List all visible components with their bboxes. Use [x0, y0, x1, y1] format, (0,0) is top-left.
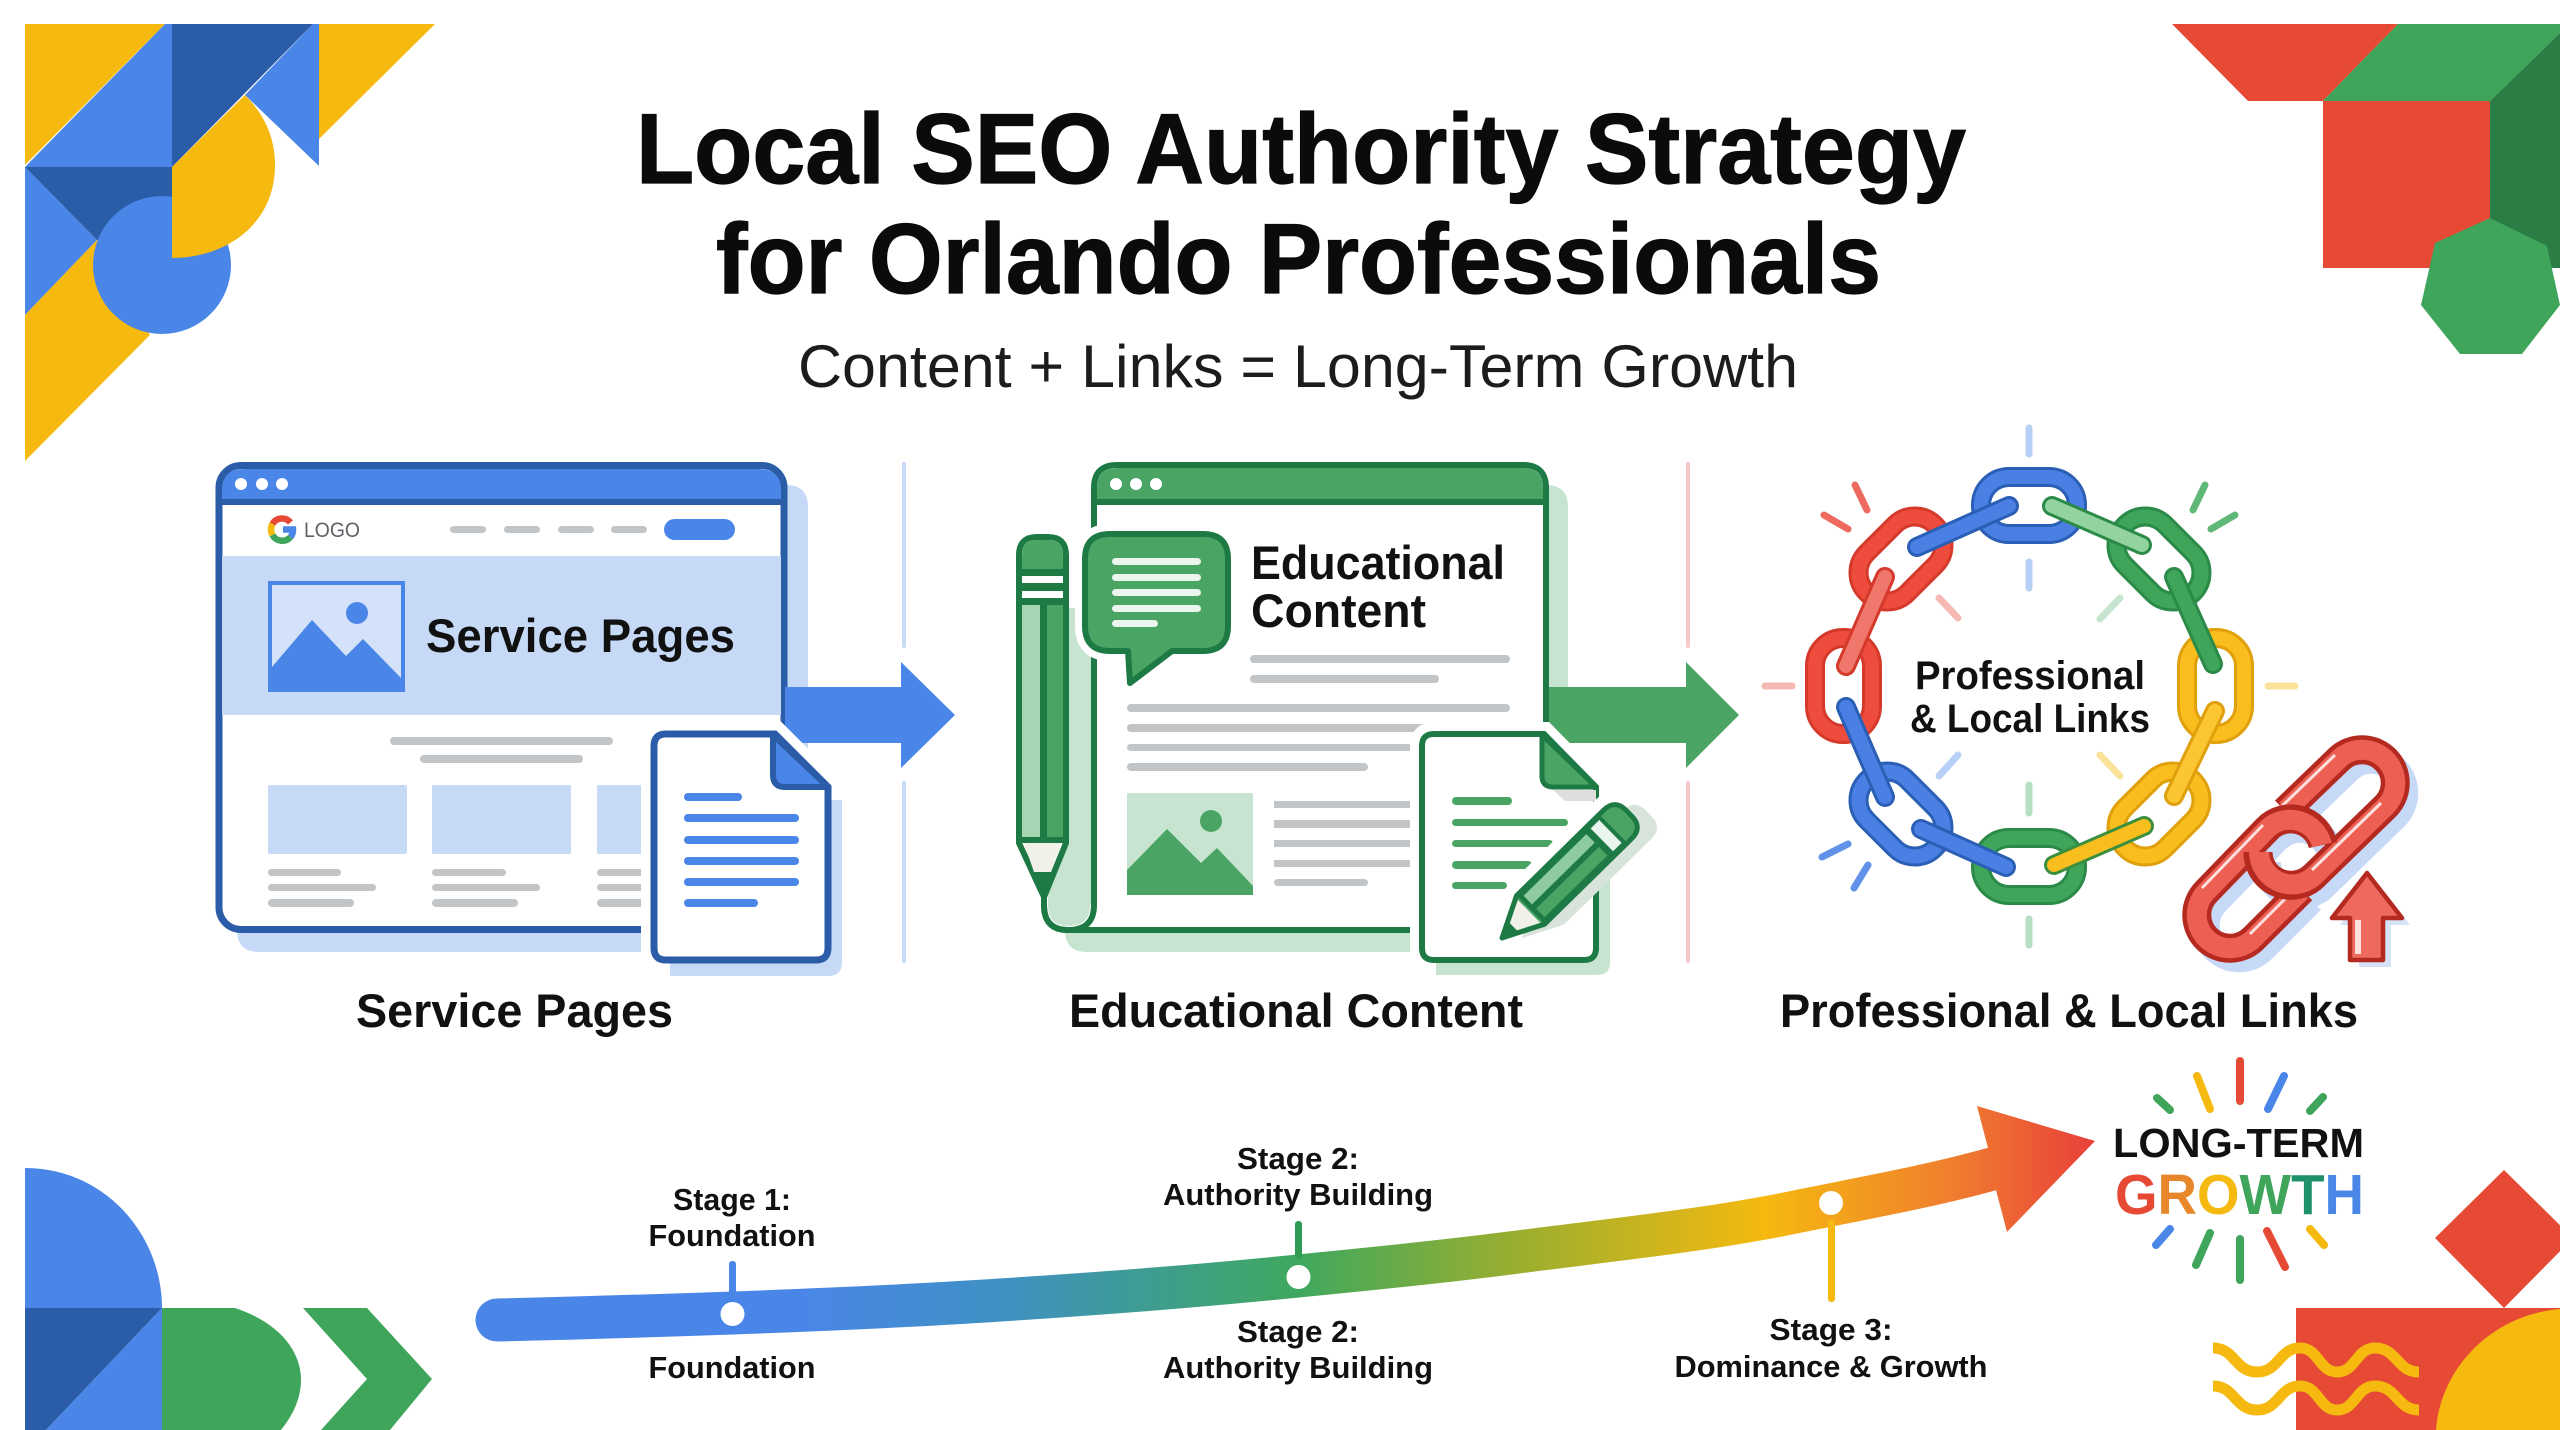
- decorative shapes: top right: [2172, 24, 2560, 354]
- stage 2 marker: [1286, 1221, 1310, 1289]
- decorative shapes: bottom left: [25, 1168, 432, 1430]
- chain centre text: [1910, 654, 2150, 741]
- badge text: GROWTH: [2115, 1163, 2364, 1227]
- title: Local SEO Authority Strategy: [636, 93, 1966, 204]
- badge text: [2113, 1120, 2364, 1227]
- stage 2 top label: [1163, 1141, 1433, 1212]
- heading: educational content: Educational: [1251, 536, 1505, 589]
- icon: tall pencil: [1019, 537, 1066, 897]
- stage 2 bottom label: Authority Building: [1163, 1350, 1433, 1385]
- chain centre text: Professional: [1915, 654, 2145, 698]
- radiating rays: [1765, 428, 2295, 945]
- stage 2 bottom label: Stage 2:: [1237, 1314, 1359, 1349]
- decorative shapes: top left: [25, 24, 435, 461]
- chain centre text: & Local Links: [1910, 697, 2150, 741]
- lower link: [2197, 819, 2323, 948]
- title: [636, 93, 1966, 314]
- heading: educational content: [1251, 536, 1505, 637]
- stage 3 label: Stage 3:: [1770, 1312, 1892, 1347]
- stage 2 bottom label: [1163, 1314, 1433, 1385]
- icon: red link: [2197, 750, 2404, 958]
- chain connecting bars: [1846, 506, 2215, 867]
- hero banner: Service Pages: [426, 609, 735, 662]
- browser window: [1044, 465, 1546, 930]
- navigation bar: [450, 519, 735, 540]
- browser shadow: [1065, 485, 1568, 952]
- subtitle: Content + Links = Long-Term Growth: [798, 333, 1798, 400]
- title: for Orlando Professionals: [716, 203, 1881, 314]
- logo text: LOGO: [304, 519, 360, 542]
- stage 2: [1163, 1141, 1433, 1385]
- stage 2 top label: Authority Building: [1163, 1177, 1433, 1212]
- badge text: LONG-TERM: [2113, 1120, 2364, 1166]
- icon: speech bubble: [1085, 534, 1228, 683]
- stage 1 top label: [648, 1182, 816, 1253]
- icon: G logo: [271, 519, 293, 541]
- stage 1 marker: [720, 1261, 744, 1326]
- burst rays: [2156, 1061, 2324, 1280]
- icon: up arrow: [2332, 873, 2410, 967]
- stage 3 marker: [1819, 1191, 1843, 1302]
- chain ring links: [1815, 477, 2244, 895]
- panel: service pages: [219, 466, 955, 1037]
- scroll side: [1044, 608, 1093, 930]
- divider: blue: [902, 464, 906, 961]
- timeline: [497, 1106, 2095, 1385]
- divider: red: [1686, 464, 1690, 961]
- decorative shapes: bottom right: [2213, 1170, 2560, 1430]
- stage 1: [648, 1182, 816, 1385]
- browser shadow: [237, 485, 808, 952]
- panel: educational content: [1019, 465, 1739, 1037]
- label: service pages: Service Pages: [356, 984, 673, 1037]
- document icon: [654, 734, 842, 976]
- label: professional and local links: Professional & Local Links: [1780, 984, 2358, 1037]
- hero banner: [222, 556, 781, 715]
- text placeholders: [1127, 655, 1510, 886]
- stage 1 bottom label: Foundation: [648, 1350, 816, 1385]
- label: educational content: Educational Content: [1069, 984, 1523, 1037]
- stage 3 label: [1674, 1312, 1988, 1384]
- arrow: green: [1549, 662, 1739, 768]
- growth curve arrow: [497, 1106, 2095, 1320]
- browser window: [219, 466, 784, 930]
- icon: small pencil: [1488, 789, 1663, 962]
- stage 1 top label: Foundation: [648, 1218, 816, 1253]
- heading: educational content: Content: [1251, 584, 1426, 637]
- arrow: blue: [785, 662, 955, 768]
- upper link: [2258, 750, 2395, 885]
- document icon: [1422, 734, 1610, 975]
- stage 2 top label: Stage 2:: [1237, 1141, 1359, 1176]
- stage 1 top label: Stage 1:: [673, 1182, 791, 1217]
- panel: professional and local links: [1765, 428, 2410, 1037]
- stage 3: [1674, 1191, 1988, 1384]
- long-term growth badge: [2113, 1061, 2364, 1280]
- page content placeholders: [268, 737, 697, 907]
- upper link lower curl: [2258, 852, 2316, 885]
- image placeholder: [1127, 793, 1253, 895]
- stage 3 label: Dominance & Growth: [1674, 1349, 1988, 1384]
- link shadow: [2206, 760, 2404, 958]
